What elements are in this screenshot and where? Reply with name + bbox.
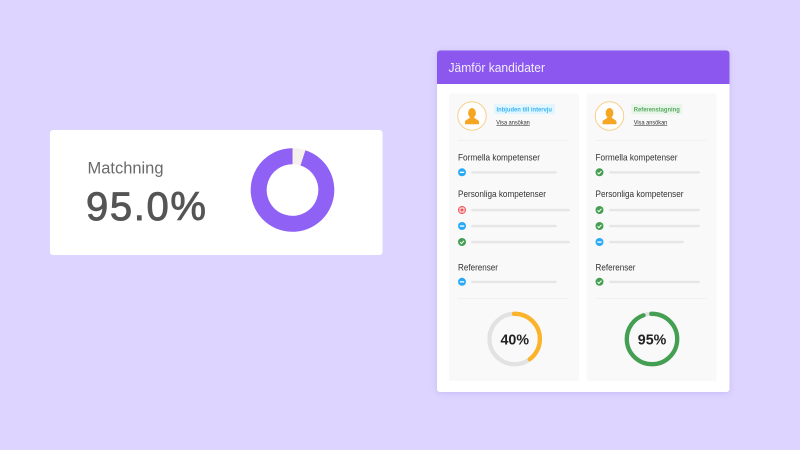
heading: references: Referenser (596, 262, 636, 273)
heading: personal skills: Personliga kompetenser (458, 189, 546, 200)
status badge (631, 104, 682, 114)
panel: candidate two (587, 94, 717, 381)
progress bar (609, 171, 700, 174)
heading: Matchning: Matchning (88, 158, 164, 177)
progress bar (609, 225, 700, 227)
icon: failed status (458, 206, 466, 214)
status badge: Referenstagning (634, 106, 680, 113)
progress bar (471, 241, 570, 243)
progress bar (609, 281, 700, 283)
gauge: 40% (490, 314, 540, 364)
icon: partial status (596, 238, 604, 246)
title: Jämför kandidater (448, 60, 546, 75)
gauge: 40%: 40% (500, 331, 529, 348)
score value: 95.0% (86, 185, 206, 229)
header bar (437, 50, 730, 84)
link: view application: Visa ansökan (634, 119, 668, 126)
icon: passed status (596, 206, 604, 214)
donut chart (250, 147, 335, 233)
icon: passed status (458, 238, 466, 246)
icon: passed status (596, 168, 604, 176)
link: view application: Visa ansökan (496, 119, 530, 126)
icon: partial status (458, 278, 466, 286)
panel: matching score card (50, 130, 382, 255)
heading: formal skills: Formella kompetenser (458, 152, 540, 164)
icon: avatar (595, 102, 624, 130)
heading: formal skills: Formella kompetenser (596, 152, 678, 164)
panel: compare candidates (437, 50, 730, 392)
progress bar (471, 225, 557, 227)
heading: personal skills: Personliga kompetenser (596, 189, 684, 200)
icon: partial status (458, 222, 466, 230)
progress bar (609, 209, 700, 211)
progress bar (609, 241, 684, 243)
progress bar (471, 281, 557, 283)
panel: candidate one (449, 94, 579, 381)
status badge: Inbjuden till intervju (496, 106, 552, 113)
icon: passed status (596, 278, 604, 286)
icon: passed status (596, 222, 604, 230)
icon: avatar (458, 102, 486, 130)
status badge (494, 104, 555, 114)
progress bar (471, 209, 570, 211)
gauge: 95% (627, 314, 677, 364)
progress bar (471, 171, 557, 174)
icon: partial status (458, 168, 466, 176)
heading: references: Referenser (458, 262, 498, 273)
gauge: 95%: 95% (638, 331, 666, 348)
